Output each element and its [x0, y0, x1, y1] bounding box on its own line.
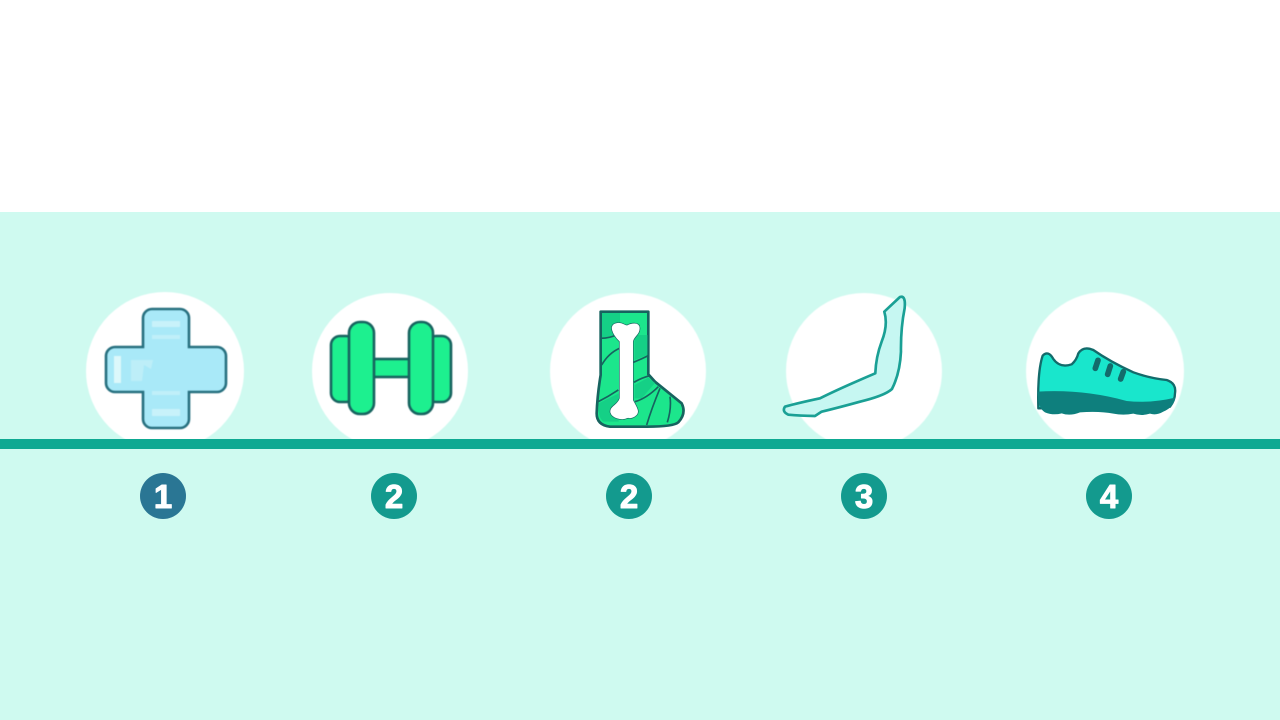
badge: 4 — [1086, 473, 1132, 519]
icon: dumbbell — [331, 322, 451, 414]
badge: 2: 2 — [385, 478, 403, 515]
badge: 1 — [140, 473, 186, 519]
icon: running shoe — [1038, 348, 1175, 415]
icon: medical cross bandage — [106, 309, 226, 428]
panel: mint background band — [0, 212, 1280, 720]
icon: bent leg — [784, 297, 905, 416]
badge: 2 — [371, 473, 417, 519]
icon: leg cast with bone — [597, 312, 684, 427]
badge: 3 — [841, 473, 887, 519]
white icon circles — [86, 292, 1184, 450]
badge: 2 — [606, 473, 652, 519]
badge: 4: 4 — [1100, 478, 1119, 515]
badge: 3: 3 — [855, 478, 873, 515]
badge: 1: 1 — [154, 478, 172, 515]
teal timeline — [0, 439, 1280, 449]
badge: 2: 2 — [620, 478, 638, 515]
